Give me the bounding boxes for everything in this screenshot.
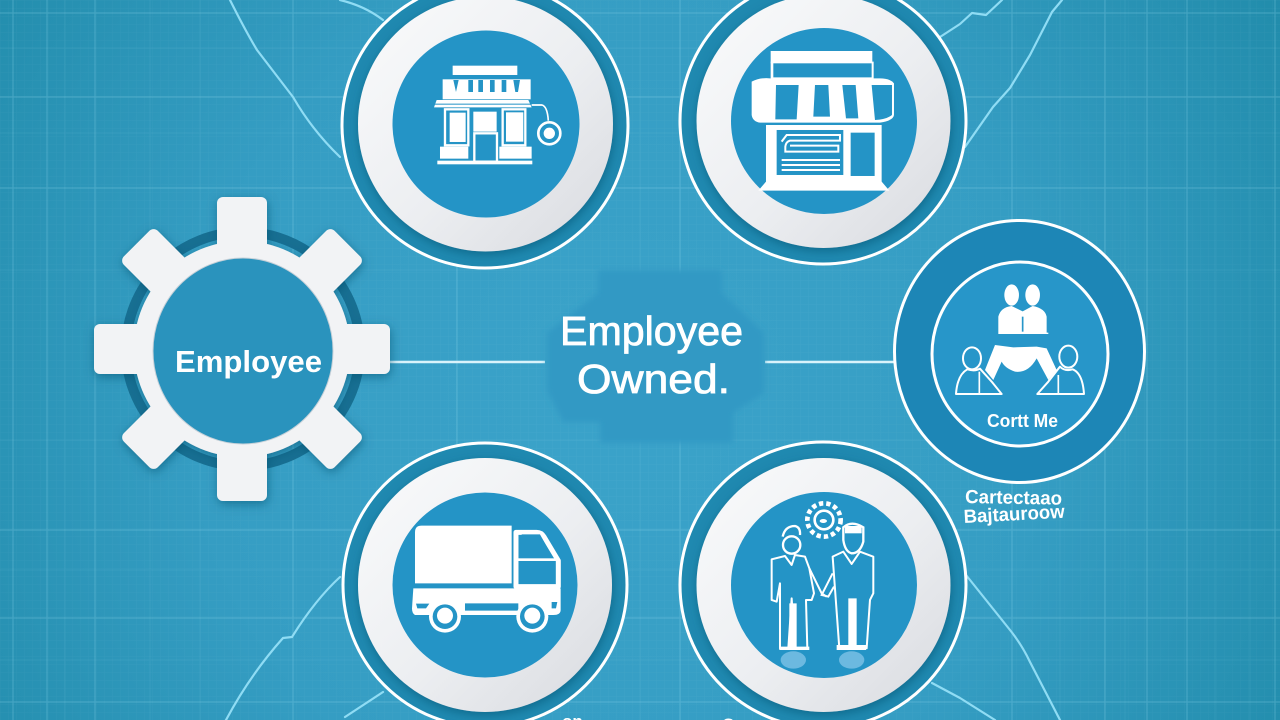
panel: store badge top left: [342, 0, 628, 268]
panel: delivery truck badge bottom left: [343, 443, 627, 720]
icon: storefront with striped awning: [752, 51, 894, 191]
panel: partnership badge bottom right: [680, 442, 966, 720]
side caption: Bajtauroow: [963, 502, 1065, 528]
gear label: Employee: [175, 344, 322, 379]
title: Owned.: [577, 356, 730, 402]
side caption: [963, 487, 1065, 528]
title: Employee: [560, 308, 743, 354]
clipped bottom captions: [562, 712, 734, 720]
network connector curves: [226, 0, 1062, 720]
title: [560, 308, 743, 402]
panel: gear with Employee label: [94, 197, 390, 501]
central title block: [547, 270, 764, 443]
panel: storefront badge top right: [680, 0, 966, 264]
icon: team meeting: [956, 284, 1084, 394]
side caption: Cartectaao: [965, 487, 1062, 510]
icon: two colleagues with gear: [772, 503, 873, 669]
badge caption: Cortt Me: [987, 411, 1058, 431]
icon: delivery truck: [412, 526, 561, 633]
icon: small shop with tag: [434, 66, 560, 164]
horizontal connector lines: [390, 361, 895, 363]
panel: team badge right: [894, 220, 1144, 482]
